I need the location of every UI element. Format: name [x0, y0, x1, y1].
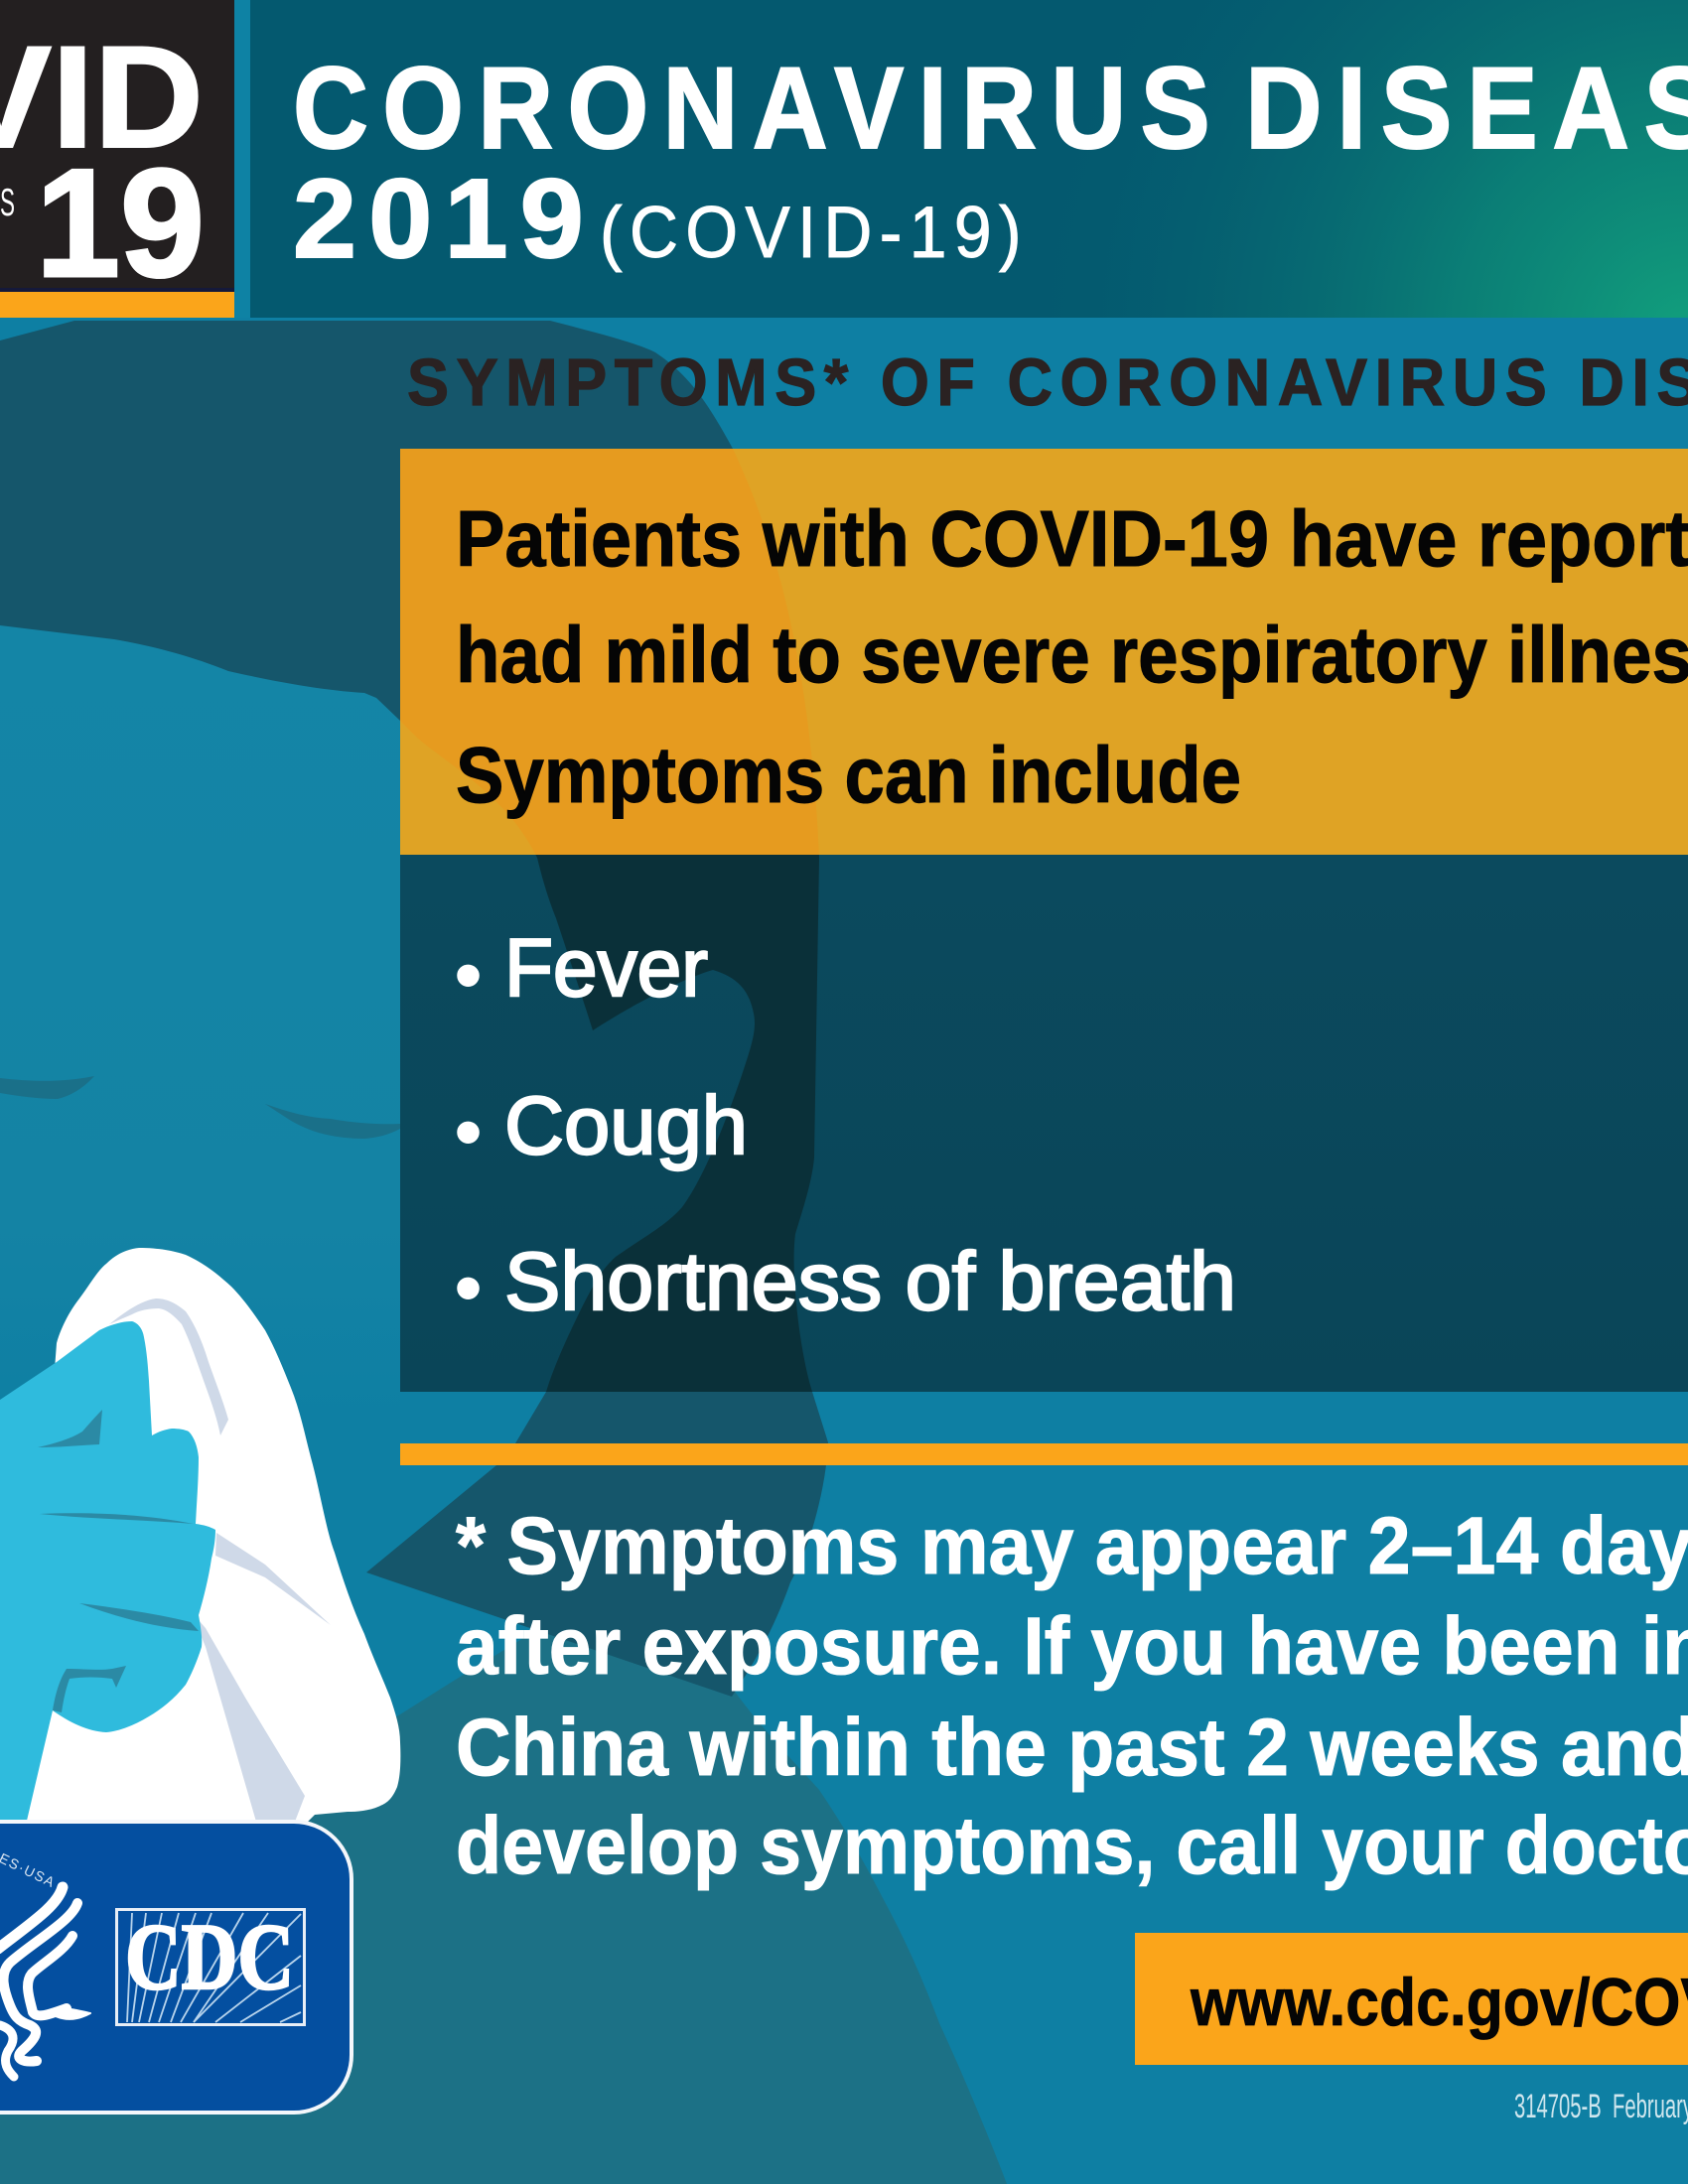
icon: hhs eagle	[0, 1887, 90, 2077]
eagle beak	[50, 2008, 90, 2019]
logo letters: CDC	[125, 1904, 294, 2009]
symptom: shortness of breath: Shortness of breath	[504, 1235, 1236, 1327]
divider bar	[400, 1443, 1688, 1465]
footnote text	[456, 1501, 1688, 1891]
eagle stripe two	[3, 1903, 77, 2062]
hair showing through dark panel	[536, 855, 819, 1392]
dark fill	[400, 855, 1688, 1392]
dark block	[0, 0, 234, 288]
illustration: sneezing person silhouette	[0, 321, 1007, 2184]
tissue fold middle	[215, 1533, 331, 1625]
title word: coronavirus: CORONAVIRUS	[293, 43, 1224, 173]
orange bar	[0, 292, 234, 318]
orange fill	[400, 449, 1688, 855]
illustration: tissue and hand	[0, 1248, 400, 1832]
bullet: cough: •	[454, 1085, 483, 1177]
logo rays	[127, 1913, 301, 2022]
panel: orange intro	[400, 449, 1688, 855]
logo frame	[117, 1910, 304, 2025]
knuckle line two	[40, 1513, 194, 1524]
eagle stripe one	[0, 1887, 63, 1949]
panel: symptom list	[400, 855, 1688, 1392]
face tone	[0, 625, 400, 1420]
hand	[0, 1321, 215, 1821]
tissue fold bottom	[192, 1612, 305, 1822]
header: title panel	[250, 0, 1688, 318]
eagle lower feathers	[0, 2025, 14, 2077]
knuckle line one	[38, 1410, 102, 1447]
symptom: cough: Cough	[504, 1079, 748, 1171]
title abbreviation: (COVID-19)	[600, 193, 1029, 273]
wordmark 19: 19	[36, 137, 205, 309]
eagle stripe three	[28, 1936, 72, 2015]
icon: cdc logo	[117, 1904, 304, 2025]
button fill	[1135, 1933, 1688, 2065]
hair	[0, 321, 828, 1697]
left eye	[0, 1076, 94, 1099]
logo panel	[0, 1822, 352, 2113]
title year: 2019	[293, 156, 596, 281]
neck and shoulder	[0, 1618, 1007, 2184]
symptom: fever: Fever	[504, 921, 708, 1014]
blue strip	[234, 0, 250, 318]
header: left title block	[0, 0, 250, 318]
intro line three: Symptoms can include	[456, 731, 1241, 819]
navy rule	[0, 288, 234, 292]
small letter S: S	[0, 182, 15, 224]
knuckle line three	[79, 1603, 199, 1631]
rounded blue panel	[0, 1822, 352, 2113]
bullet: fever: •	[454, 928, 483, 1021]
url button	[1135, 1933, 1688, 2065]
knuckle line four	[53, 1666, 126, 1712]
panel fill	[250, 0, 1688, 318]
green glow	[250, 0, 1688, 318]
hair showing through orange	[400, 449, 1688, 855]
tissue fold top	[109, 1298, 228, 1435]
tissue	[20, 1248, 400, 1832]
right eye	[265, 1104, 400, 1139]
bullet: shortness of breath: •	[454, 1241, 483, 1333]
